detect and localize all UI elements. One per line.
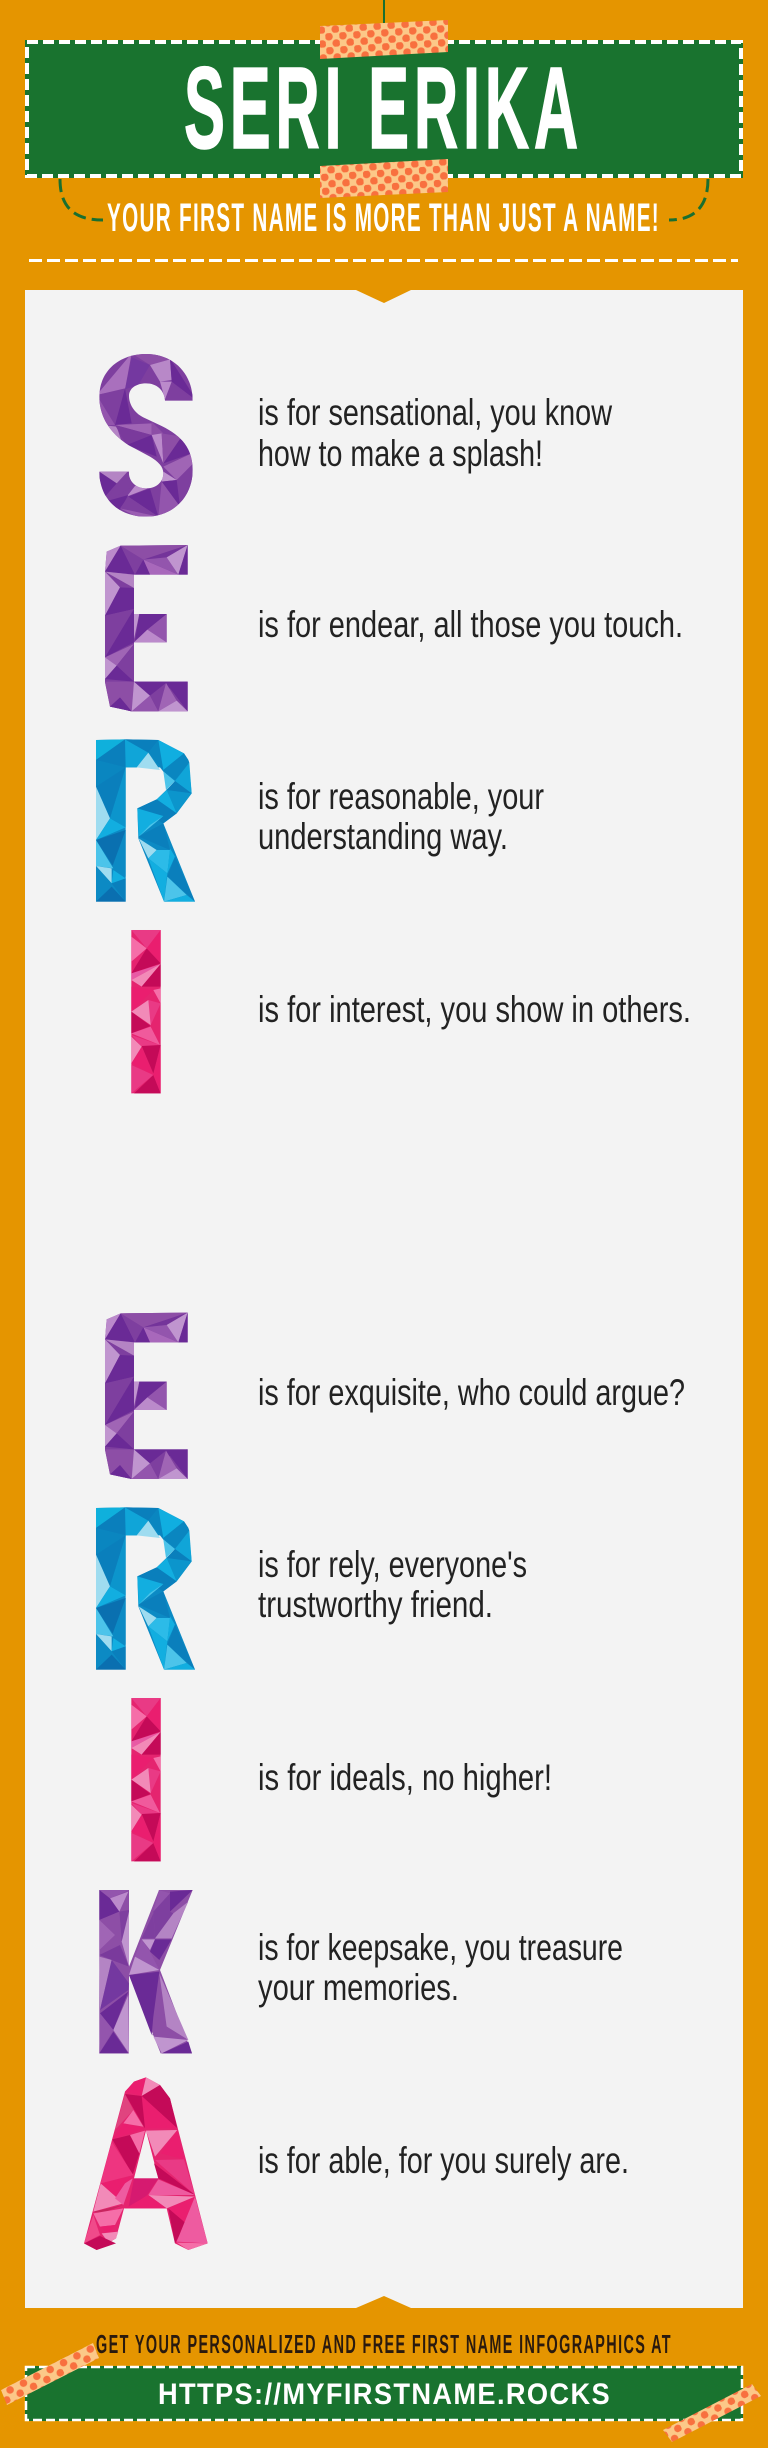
- text: R: is for reasonable, your: [258, 776, 544, 817]
- text: R second: is for rely, everyone's: [258, 1544, 527, 1585]
- hanging line: [383, 0, 385, 24]
- letter R art (second word): [96, 1507, 195, 1670]
- footer banner: [25, 2366, 743, 2421]
- text: R: understanding way.: [258, 816, 508, 857]
- letter K art: [99, 1890, 193, 2053]
- text: S: [258, 392, 612, 474]
- letter I art: [131, 930, 161, 1093]
- title banner: [25, 40, 743, 178]
- panel: letters: [25, 290, 743, 2308]
- letter A art: [84, 2077, 208, 2250]
- letter I art (second word): [131, 1698, 161, 1861]
- letter S art: [99, 354, 193, 517]
- letter E art (second word): [105, 1313, 188, 1479]
- tape: footer left: [1, 2343, 99, 2405]
- text: R second: trustworthy friend.: [258, 1584, 493, 1625]
- text: K: [258, 1927, 623, 2008]
- letter E art: [105, 545, 188, 711]
- text: I second: is for ideals, no higher!: [258, 1757, 552, 1798]
- text: S: is for sensational, you know: [258, 392, 612, 433]
- text: S: how to make a splash!: [258, 433, 543, 474]
- text: R: [258, 776, 544, 857]
- text: R second: [258, 1544, 527, 1625]
- text: K: your memories.: [258, 1967, 459, 2008]
- tape: top: [320, 20, 448, 59]
- text: K: is for keepsake, you treasure: [258, 1927, 623, 1968]
- tape: footer right: [663, 2384, 761, 2442]
- tape: bottom: [320, 159, 448, 198]
- letter R art: [96, 739, 195, 902]
- text: A: is for able, for you surely are.: [258, 2140, 629, 2181]
- curved connector left: [60, 179, 103, 220]
- curved connector right: [669, 179, 708, 220]
- footer URL: HTTPS://MYFIRSTNAME.ROCKS: [158, 2378, 611, 2411]
